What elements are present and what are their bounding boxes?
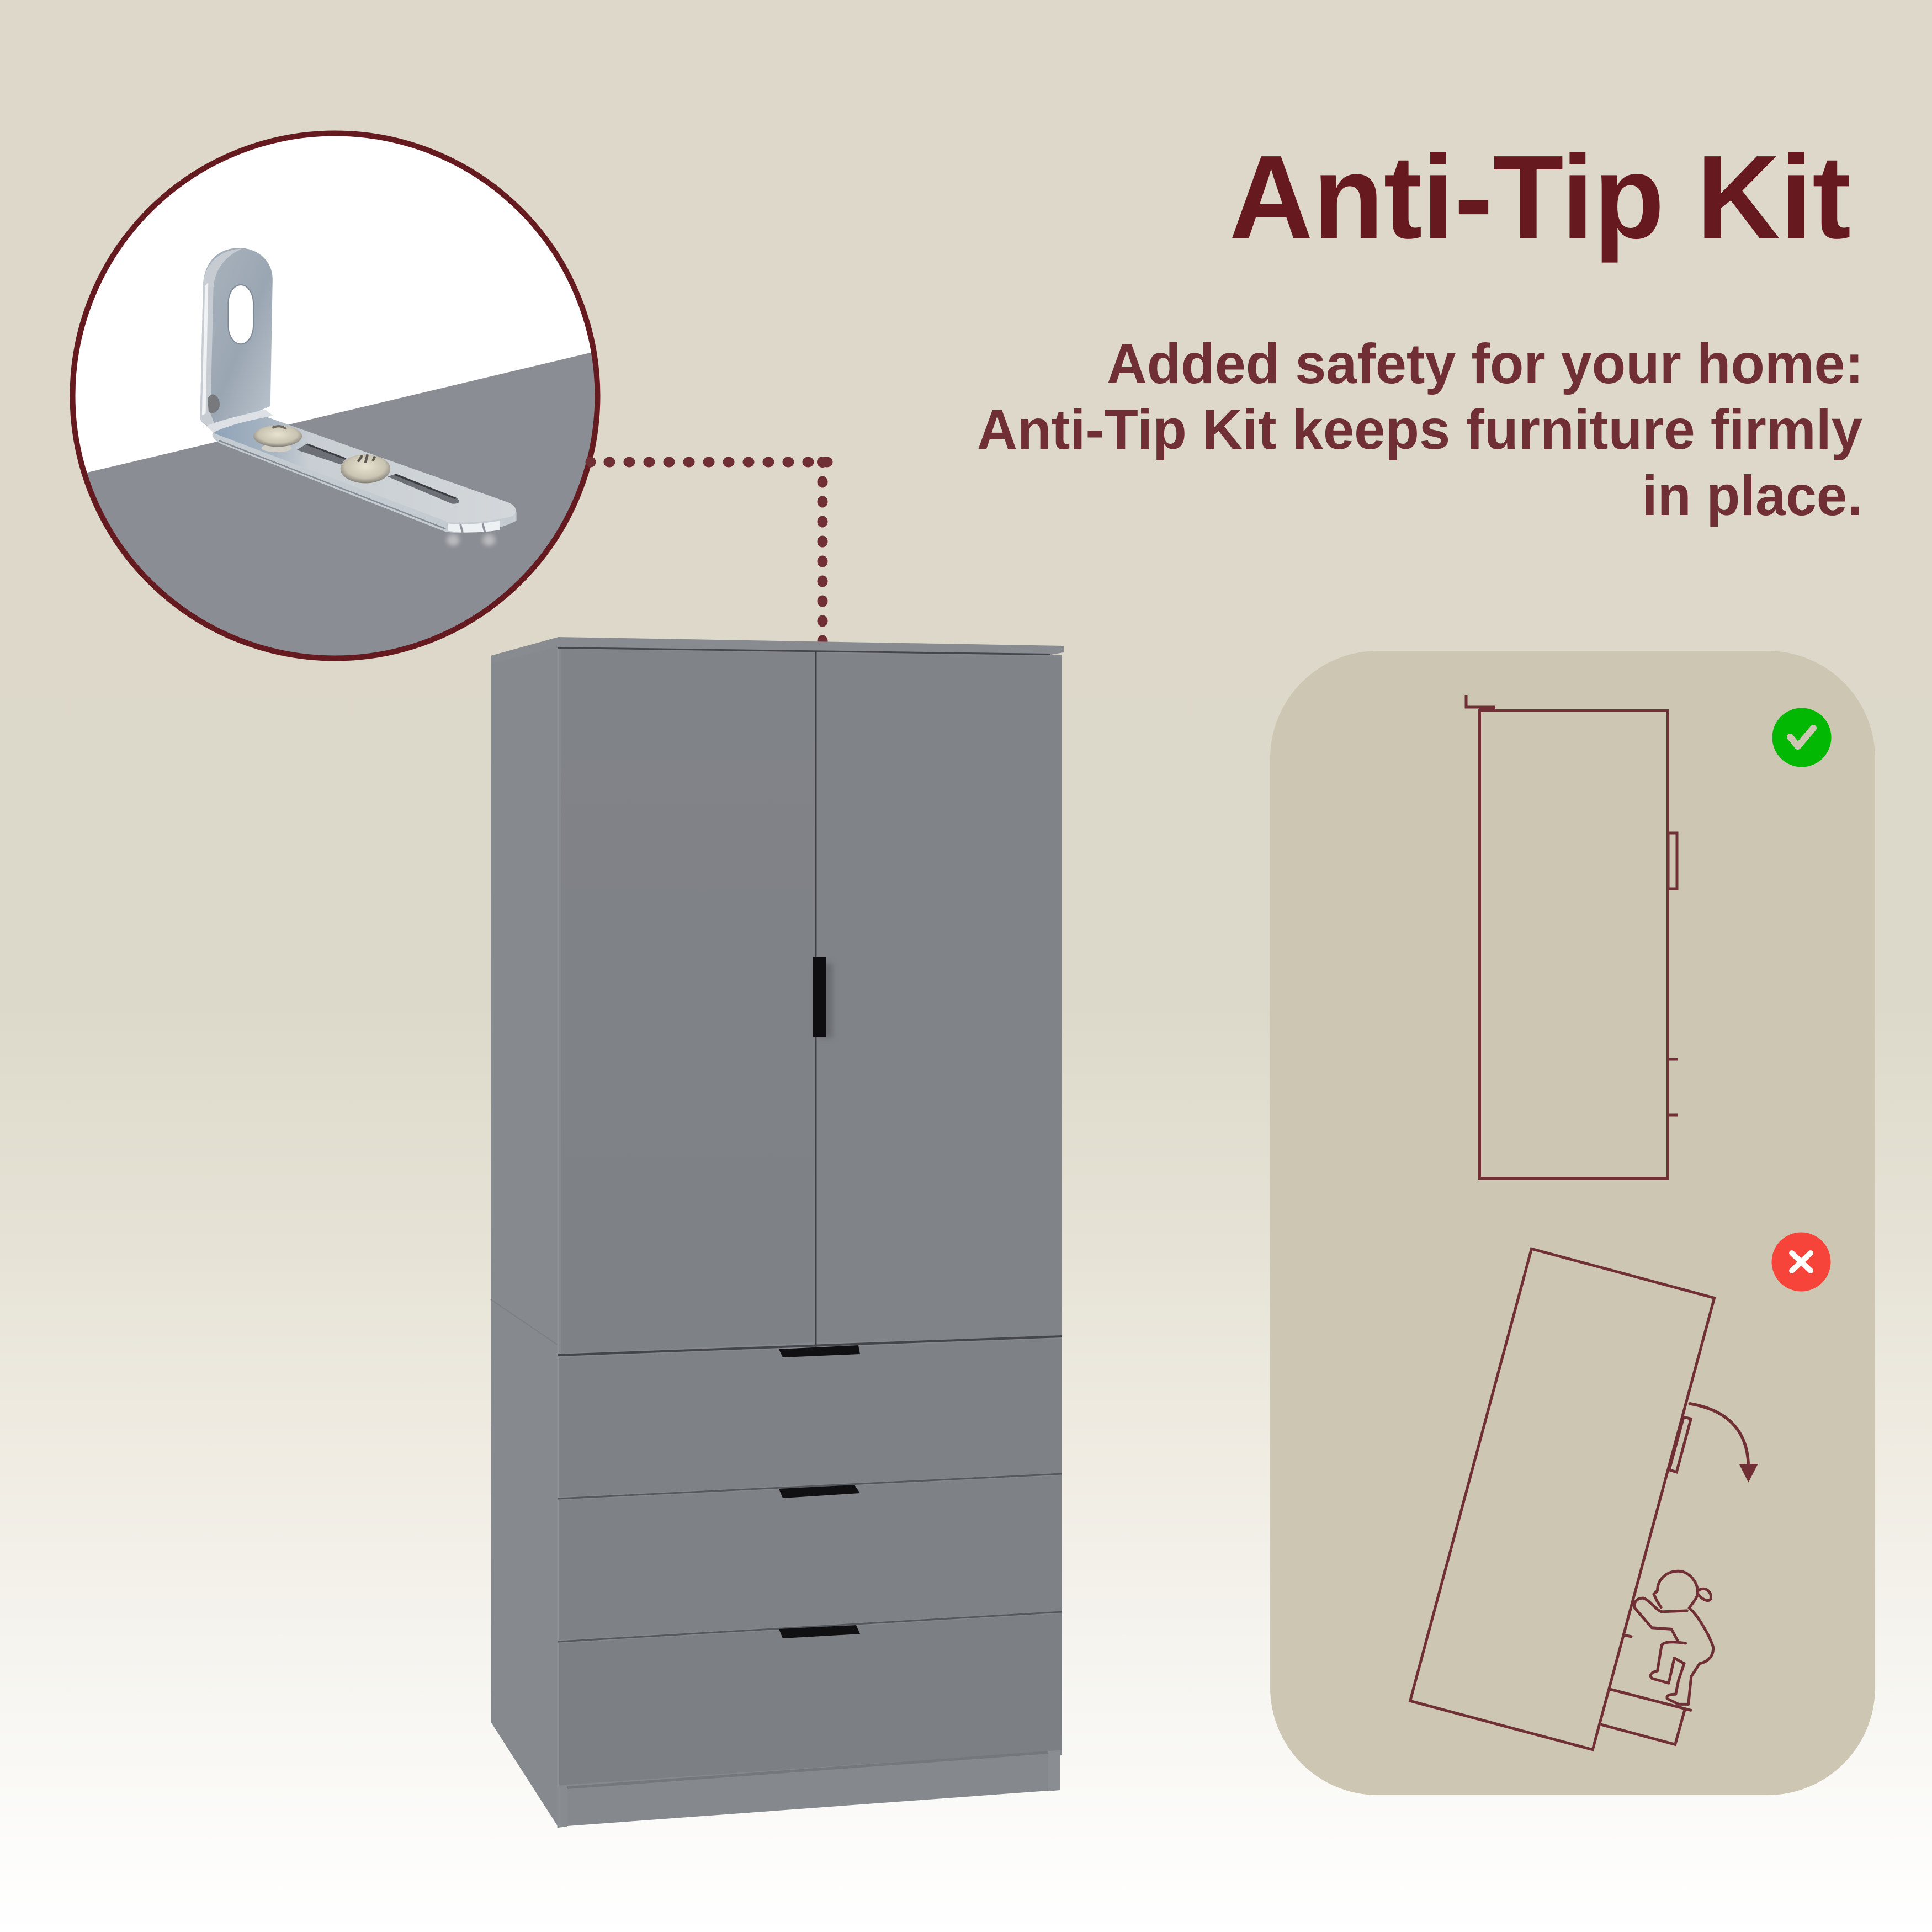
check icon [1772,708,1832,767]
cabinet door handle [1668,833,1677,889]
first connector dot on circle [585,457,596,467]
reflections under bracket end [447,534,459,546]
bracket upright [200,248,273,429]
shadow line under top [558,647,1050,655]
screw 1 [253,426,302,452]
bracket base edge [212,432,517,533]
drawer handle 2 [779,1485,860,1498]
wardrobe front body [558,647,1062,1791]
bracket base [214,417,516,523]
subtitle text: in place. [1642,464,1862,527]
drawer handle 1 [779,1345,860,1357]
drawer 3 [559,1613,1062,1785]
panel: tip comparison [1270,651,1875,1795]
tilted cabinet diagram [1410,1249,1758,1750]
subtitle text: Added safety for your home: [1107,332,1864,395]
door handle [813,957,832,1038]
title: Anti-Tip Kit [1229,130,1851,263]
screw 2 [341,454,390,483]
upright cabinet diagram [1466,695,1678,1178]
base slot [297,443,459,504]
white backdrop [75,136,591,473]
left door [561,649,815,1354]
product detail circle [70,130,601,661]
subtitle text: Anti-Tip Kit keeps furniture firmly [977,398,1862,461]
tilted drawer open [1601,1635,1692,1744]
slot in upright [228,285,253,344]
bracket [200,248,517,546]
wardrobe side panel [491,637,559,1828]
tip arrow [1690,1404,1758,1483]
bracket fold [206,410,273,432]
wardrobe [491,637,1064,1828]
plinth [558,1750,1060,1828]
right door [817,653,1062,1342]
tilted door handle [1669,1417,1691,1472]
wardrobe top slab [491,637,1064,664]
drawer 1 [559,1339,1062,1497]
cross icon [1772,1232,1830,1292]
circle outline [72,134,597,658]
drawer 2 [559,1475,1062,1640]
anti-tip bracket symbol [1466,695,1495,707]
climbing child [1634,1571,1713,1704]
drawer handle 3 [779,1625,860,1638]
subtitle text [977,332,1864,527]
grey wardrobe top surface [87,352,595,656]
dotted connector line [604,457,832,647]
drawer tick marks [1669,1059,1678,1115]
